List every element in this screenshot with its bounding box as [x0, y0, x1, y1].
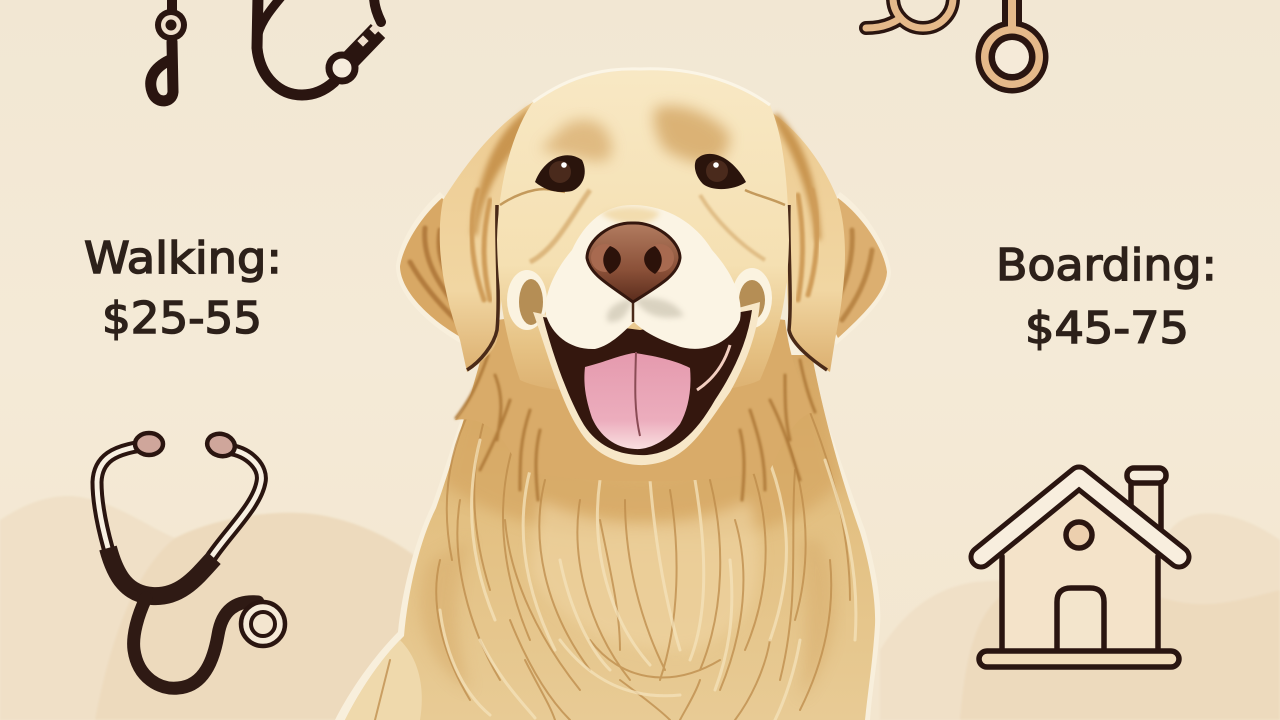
dog nose: [587, 223, 680, 302]
icon: stethoscope: [97, 431, 285, 688]
icon: leash loop top left: [257, 0, 381, 95]
dog left ear: [396, 192, 474, 344]
dog muzzle: [546, 205, 741, 349]
icon: house: [979, 468, 1179, 667]
dog body: [335, 340, 880, 720]
icon: leash clip top left: [151, 0, 187, 101]
walking label: [84, 233, 282, 344]
icon: curled tube top right: [866, 0, 953, 28]
dog eyes: [535, 154, 746, 192]
dog mouth: [533, 302, 760, 465]
dog neck fur under head: [455, 300, 815, 500]
icon: ring pendant top right: [976, 0, 1048, 94]
boarding label: $45-75: [1025, 303, 1189, 354]
dog cheek dimples: [507, 268, 772, 330]
walking label: Walking:: [84, 233, 282, 284]
fur strands light: [440, 440, 856, 720]
fur strands dark: [375, 400, 850, 720]
brow markings: [540, 120, 612, 162]
dog right head flap: [752, 100, 845, 372]
background hills: [0, 496, 1280, 720]
tongue: [584, 353, 691, 449]
walking label: $25-55: [102, 293, 262, 344]
dog face: [497, 69, 789, 395]
dog left head flap: [440, 102, 533, 372]
golden retriever illustration: [335, 69, 891, 720]
boarding label: [996, 240, 1217, 354]
boarding label: Boarding:: [996, 240, 1217, 291]
dog right ear: [819, 192, 891, 345]
